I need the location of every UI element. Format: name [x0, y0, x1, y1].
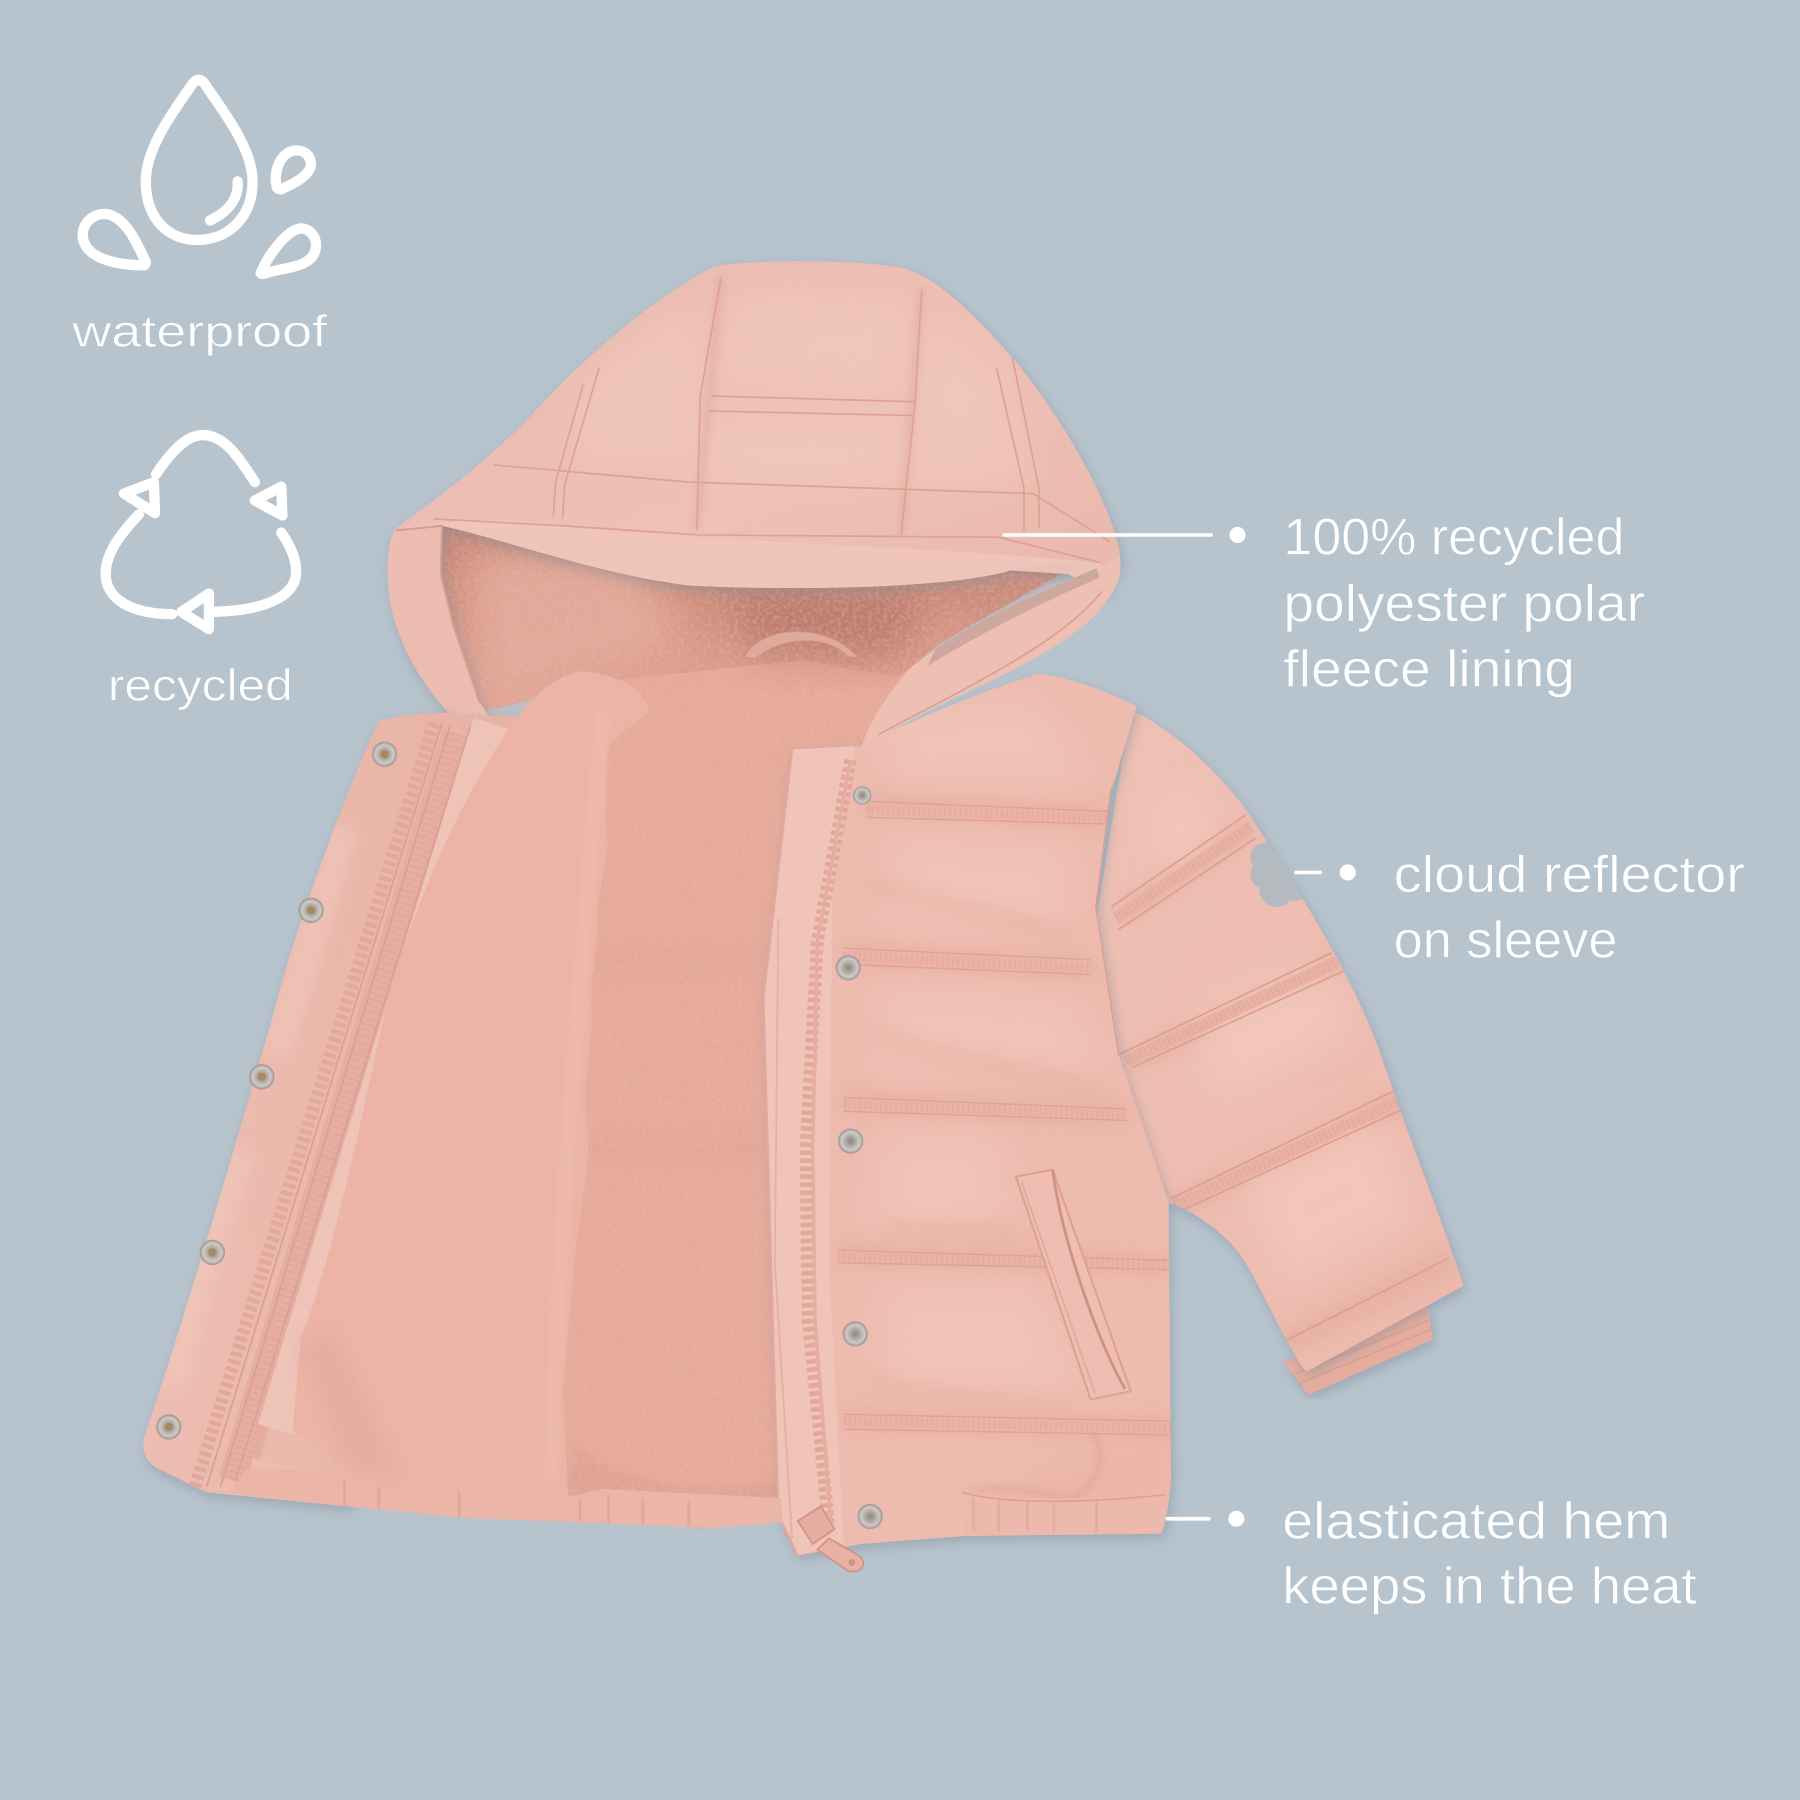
- jacket inner hood fleece: [430, 522, 1091, 712]
- right zip placket: [763, 746, 855, 1555]
- side pocket: [1016, 1170, 1131, 1399]
- callout: cloud reflector: [1296, 845, 1745, 968]
- callout: fleece lining: 100% recycled: [1283, 507, 1624, 565]
- icon: recycling arrows: [106, 435, 296, 629]
- icon: water drops: [83, 80, 316, 274]
- jacket cuff: [1283, 1306, 1433, 1395]
- infographic canvas: [72, 74, 1744, 1614]
- jacket sleeve: [1096, 709, 1464, 1372]
- icon: cloud reflector: [1250, 843, 1306, 907]
- right snaps: [836, 786, 883, 1529]
- callout: fleece lining: fleece lining: [1283, 639, 1575, 697]
- jacket photo illustration: [143, 261, 1464, 1571]
- callout: cloud reflector: cloud reflector: [1394, 845, 1745, 903]
- label: waterproof: waterproof: [71, 307, 328, 357]
- callout: fleece lining: [1004, 507, 1645, 697]
- left hem: [230, 1469, 783, 1528]
- callout: elasticated hem: keeps in the heat: [1282, 1557, 1697, 1615]
- hood right lapel: [861, 556, 1121, 752]
- right hem: [962, 1490, 1166, 1536]
- callout: cloud reflector: on sleeve: [1394, 910, 1617, 968]
- callout: fleece lining: polyester polar: [1283, 574, 1645, 632]
- jacket left front panel: [143, 713, 540, 1506]
- jacket interior back fleece: [540, 643, 930, 1529]
- callout: elasticated hem: [1167, 1491, 1697, 1615]
- hanging loop: [744, 631, 859, 659]
- fleece flap: [293, 672, 649, 1499]
- callout: elasticated hem: elasticated hem: [1282, 1491, 1670, 1549]
- zip pull: [798, 1506, 863, 1571]
- label: recycled: recycled: [108, 660, 293, 710]
- jacket right front panel: [763, 674, 1171, 1555]
- left snaps: [156, 742, 397, 1440]
- jacket hood exterior: [388, 261, 1120, 723]
